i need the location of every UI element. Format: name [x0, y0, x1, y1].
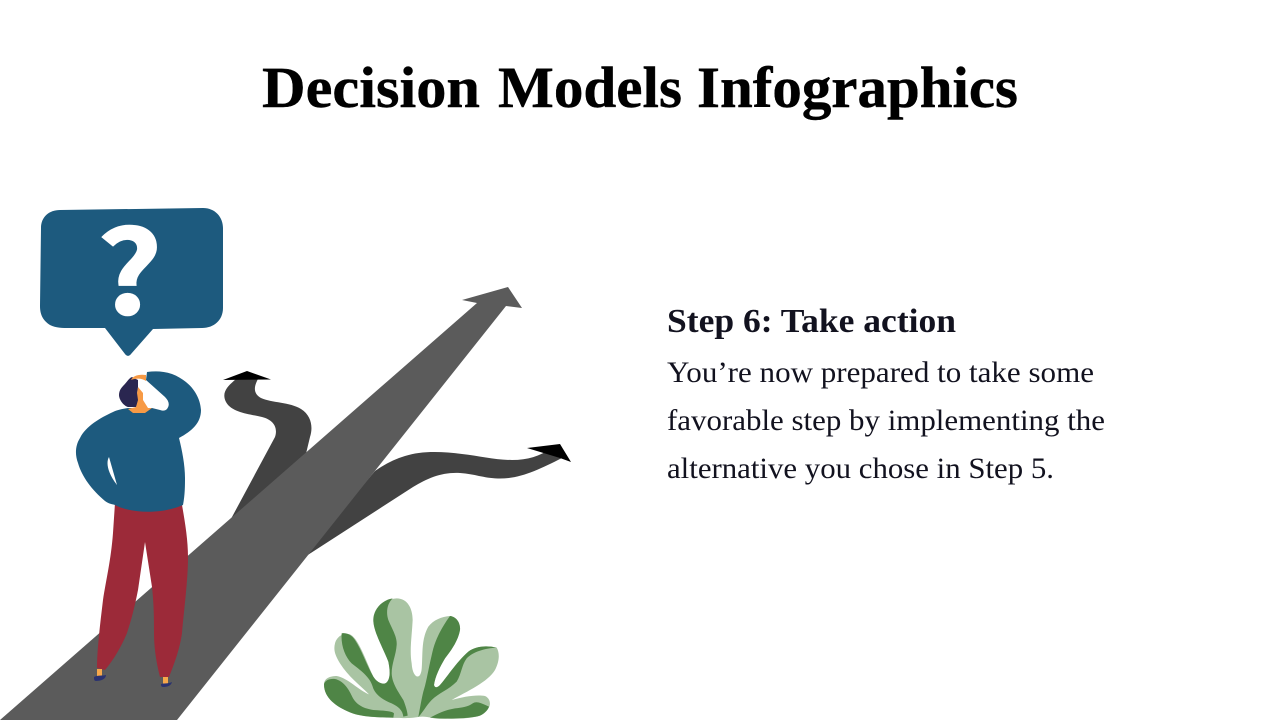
title: Decision [262, 55, 480, 120]
plant: dark lower left leaf [324, 679, 394, 718]
question mark: ? [97, 182, 162, 347]
step description: alternative you chose in Step 5. [667, 452, 1054, 485]
right road arrowhead [527, 444, 571, 462]
ankles and shoes [94, 669, 172, 687]
person standing at crossroads [76, 371, 201, 687]
step heading: Step 6: Take action [667, 303, 956, 340]
hair [119, 377, 138, 407]
illustration: decision roads [0, 287, 571, 720]
left road arrowhead [223, 371, 271, 380]
plant: dark lower right leaf [430, 702, 489, 718]
step description: favorable step by implementing the [667, 404, 1105, 437]
plant [324, 598, 499, 719]
main straight arrow road [0, 287, 522, 720]
plant: light foliage silhouette [324, 598, 499, 719]
blue sweater [76, 371, 201, 512]
plant: dark left leaves [342, 598, 408, 717]
title [262, 55, 1018, 120]
title: Models [498, 55, 682, 120]
title: Infographics [697, 55, 1018, 120]
step description: You’re now prepared to take some [667, 356, 1094, 389]
neck and face [128, 387, 152, 413]
right winding road [300, 444, 571, 560]
speech bubble with question mark [40, 182, 223, 356]
plant: dark right leaf [418, 616, 497, 717]
trousers [97, 503, 188, 677]
hand on head [131, 375, 146, 381]
step description [667, 356, 1105, 485]
left winding road [223, 371, 311, 530]
